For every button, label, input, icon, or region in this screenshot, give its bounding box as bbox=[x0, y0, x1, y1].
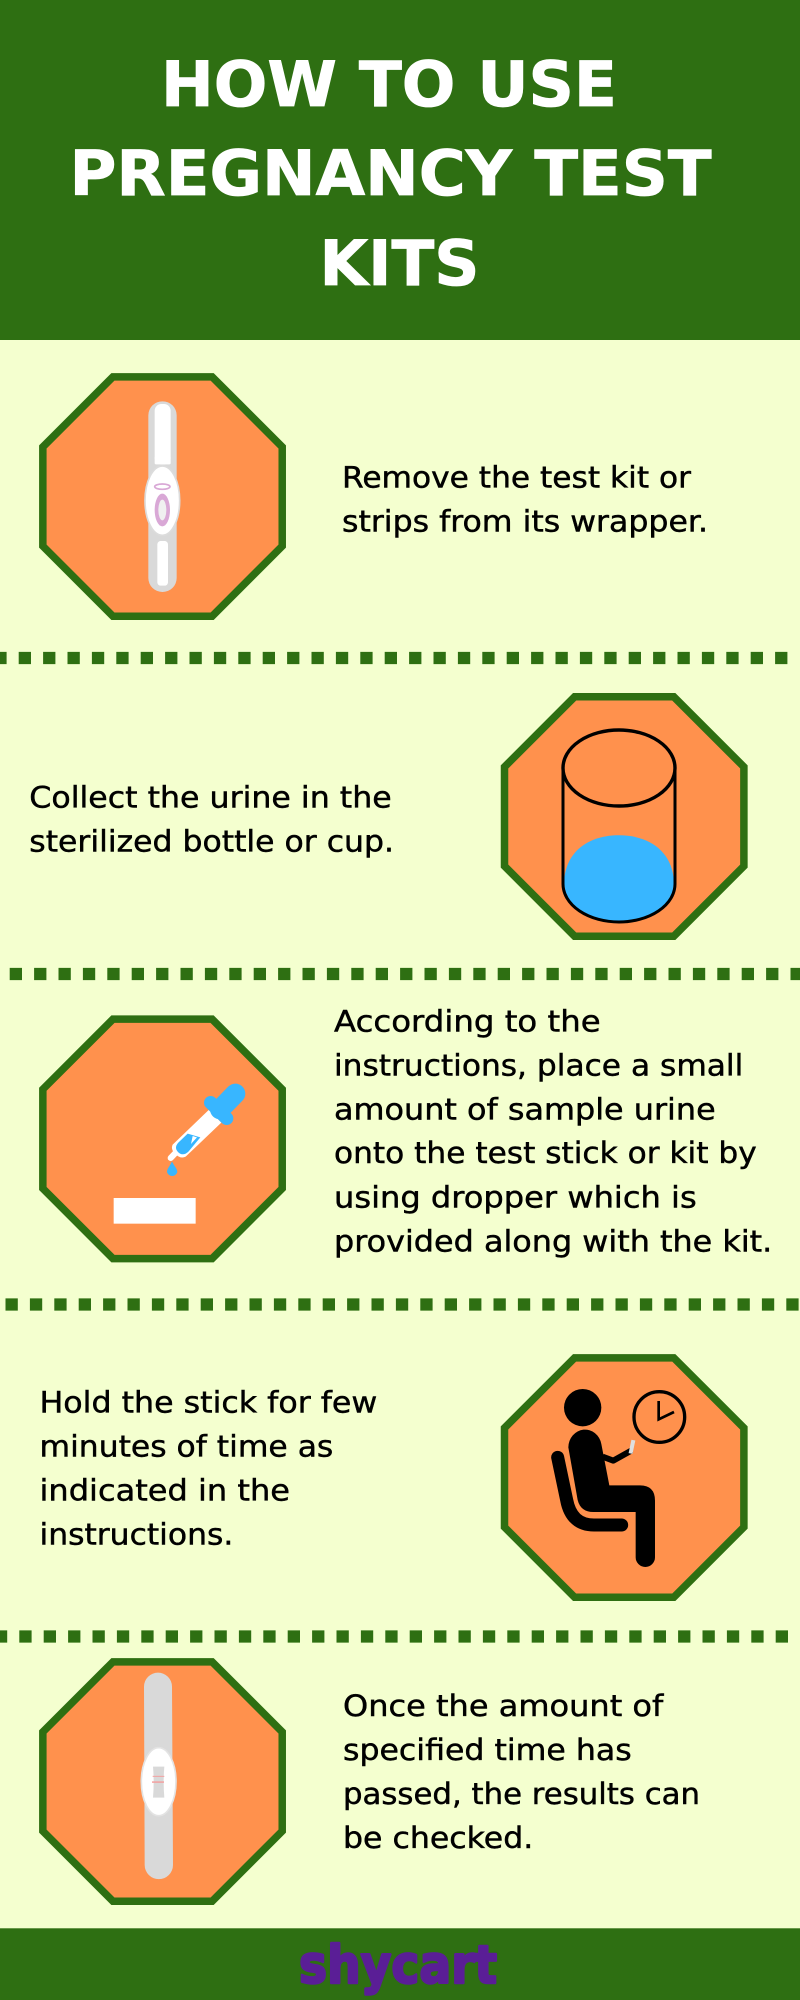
step 3 text: provided along with the kit. bbox=[334, 1224, 772, 1258]
title banner bbox=[0, 0, 800, 340]
step 3 text: According to the bbox=[334, 1005, 601, 1039]
panel: step 4 wait bbox=[40, 1358, 744, 1597]
step 1 text bbox=[342, 461, 708, 539]
step 1 text: strips from its wrapper. bbox=[342, 505, 708, 539]
step 3 text: using dropper which is bbox=[334, 1180, 697, 1214]
title banner: PREGNANCY TEST bbox=[70, 137, 712, 210]
icon: seated person with clock bbox=[504, 1358, 744, 1597]
step 4 text bbox=[40, 1386, 377, 1552]
step 4 text: instructions. bbox=[40, 1518, 233, 1552]
step 4 text: Hold the stick for few bbox=[40, 1386, 377, 1420]
panel: step 5 check results bbox=[43, 1662, 700, 1901]
panel: step 2 collect urine bbox=[29, 697, 744, 936]
step 2 text bbox=[29, 781, 394, 859]
step 3 text bbox=[334, 1005, 772, 1258]
title banner: KITS bbox=[320, 227, 480, 300]
step 5 text: be checked. bbox=[343, 1821, 533, 1855]
icon: cup with urine bbox=[504, 697, 744, 936]
panel: step 1 remove test kit bbox=[43, 377, 708, 616]
icon: test stick with result lines bbox=[43, 1662, 282, 1901]
step 5 text: passed, the results can bbox=[343, 1777, 700, 1811]
panel: step 3 dropper bbox=[43, 1005, 772, 1259]
step 2 text: Collect the urine in the bbox=[29, 781, 392, 815]
footer bar with shycart logo: shycart bbox=[299, 1935, 497, 1996]
footer bar with shycart logo bbox=[0, 1928, 800, 2000]
step 5 text: Once the amount of bbox=[343, 1689, 664, 1723]
title banner: HOW TO USE bbox=[161, 48, 617, 121]
icon: test kit in wrapper bbox=[43, 377, 282, 616]
step 4 text: minutes of time as bbox=[40, 1430, 333, 1464]
step 1 text: Remove the test kit or bbox=[342, 461, 691, 495]
step 5 text bbox=[343, 1689, 700, 1855]
step 4 text: indicated in the bbox=[40, 1474, 290, 1508]
step 3 text: amount of sample urine bbox=[334, 1092, 716, 1126]
icon: dropper and test strip bbox=[43, 1019, 282, 1259]
step 3 text: instructions, place a small bbox=[334, 1049, 743, 1083]
step 2 text: sterilized bottle or cup. bbox=[29, 825, 394, 859]
step 3 text: onto the test stick or kit by bbox=[334, 1136, 757, 1170]
step 5 text: specified time has bbox=[343, 1733, 632, 1767]
